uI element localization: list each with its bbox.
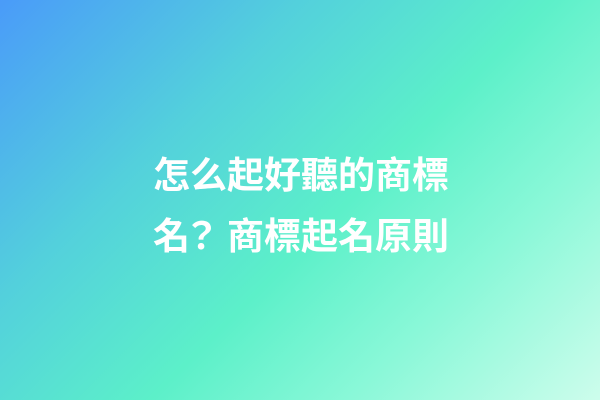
title: 怎么起好聽的商標 [153,145,449,199]
title: 名？商標起名原則 [153,206,449,260]
title [153,145,449,260]
